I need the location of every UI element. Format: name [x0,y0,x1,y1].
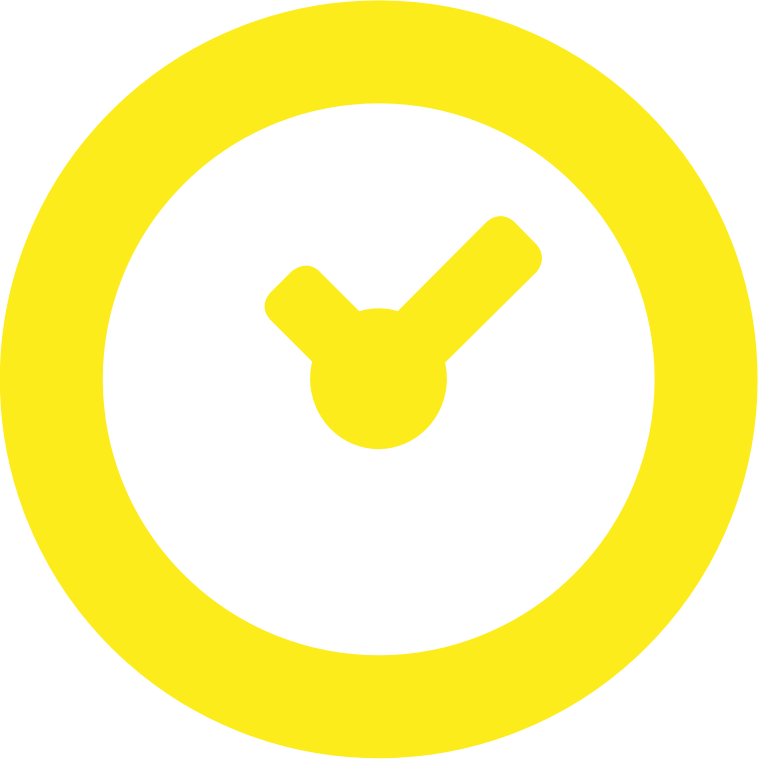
hub [310,308,447,449]
minute hand [378,216,542,400]
hour hand [264,266,379,400]
clock hands and hub [264,216,542,449]
clock ring [51,52,706,707]
